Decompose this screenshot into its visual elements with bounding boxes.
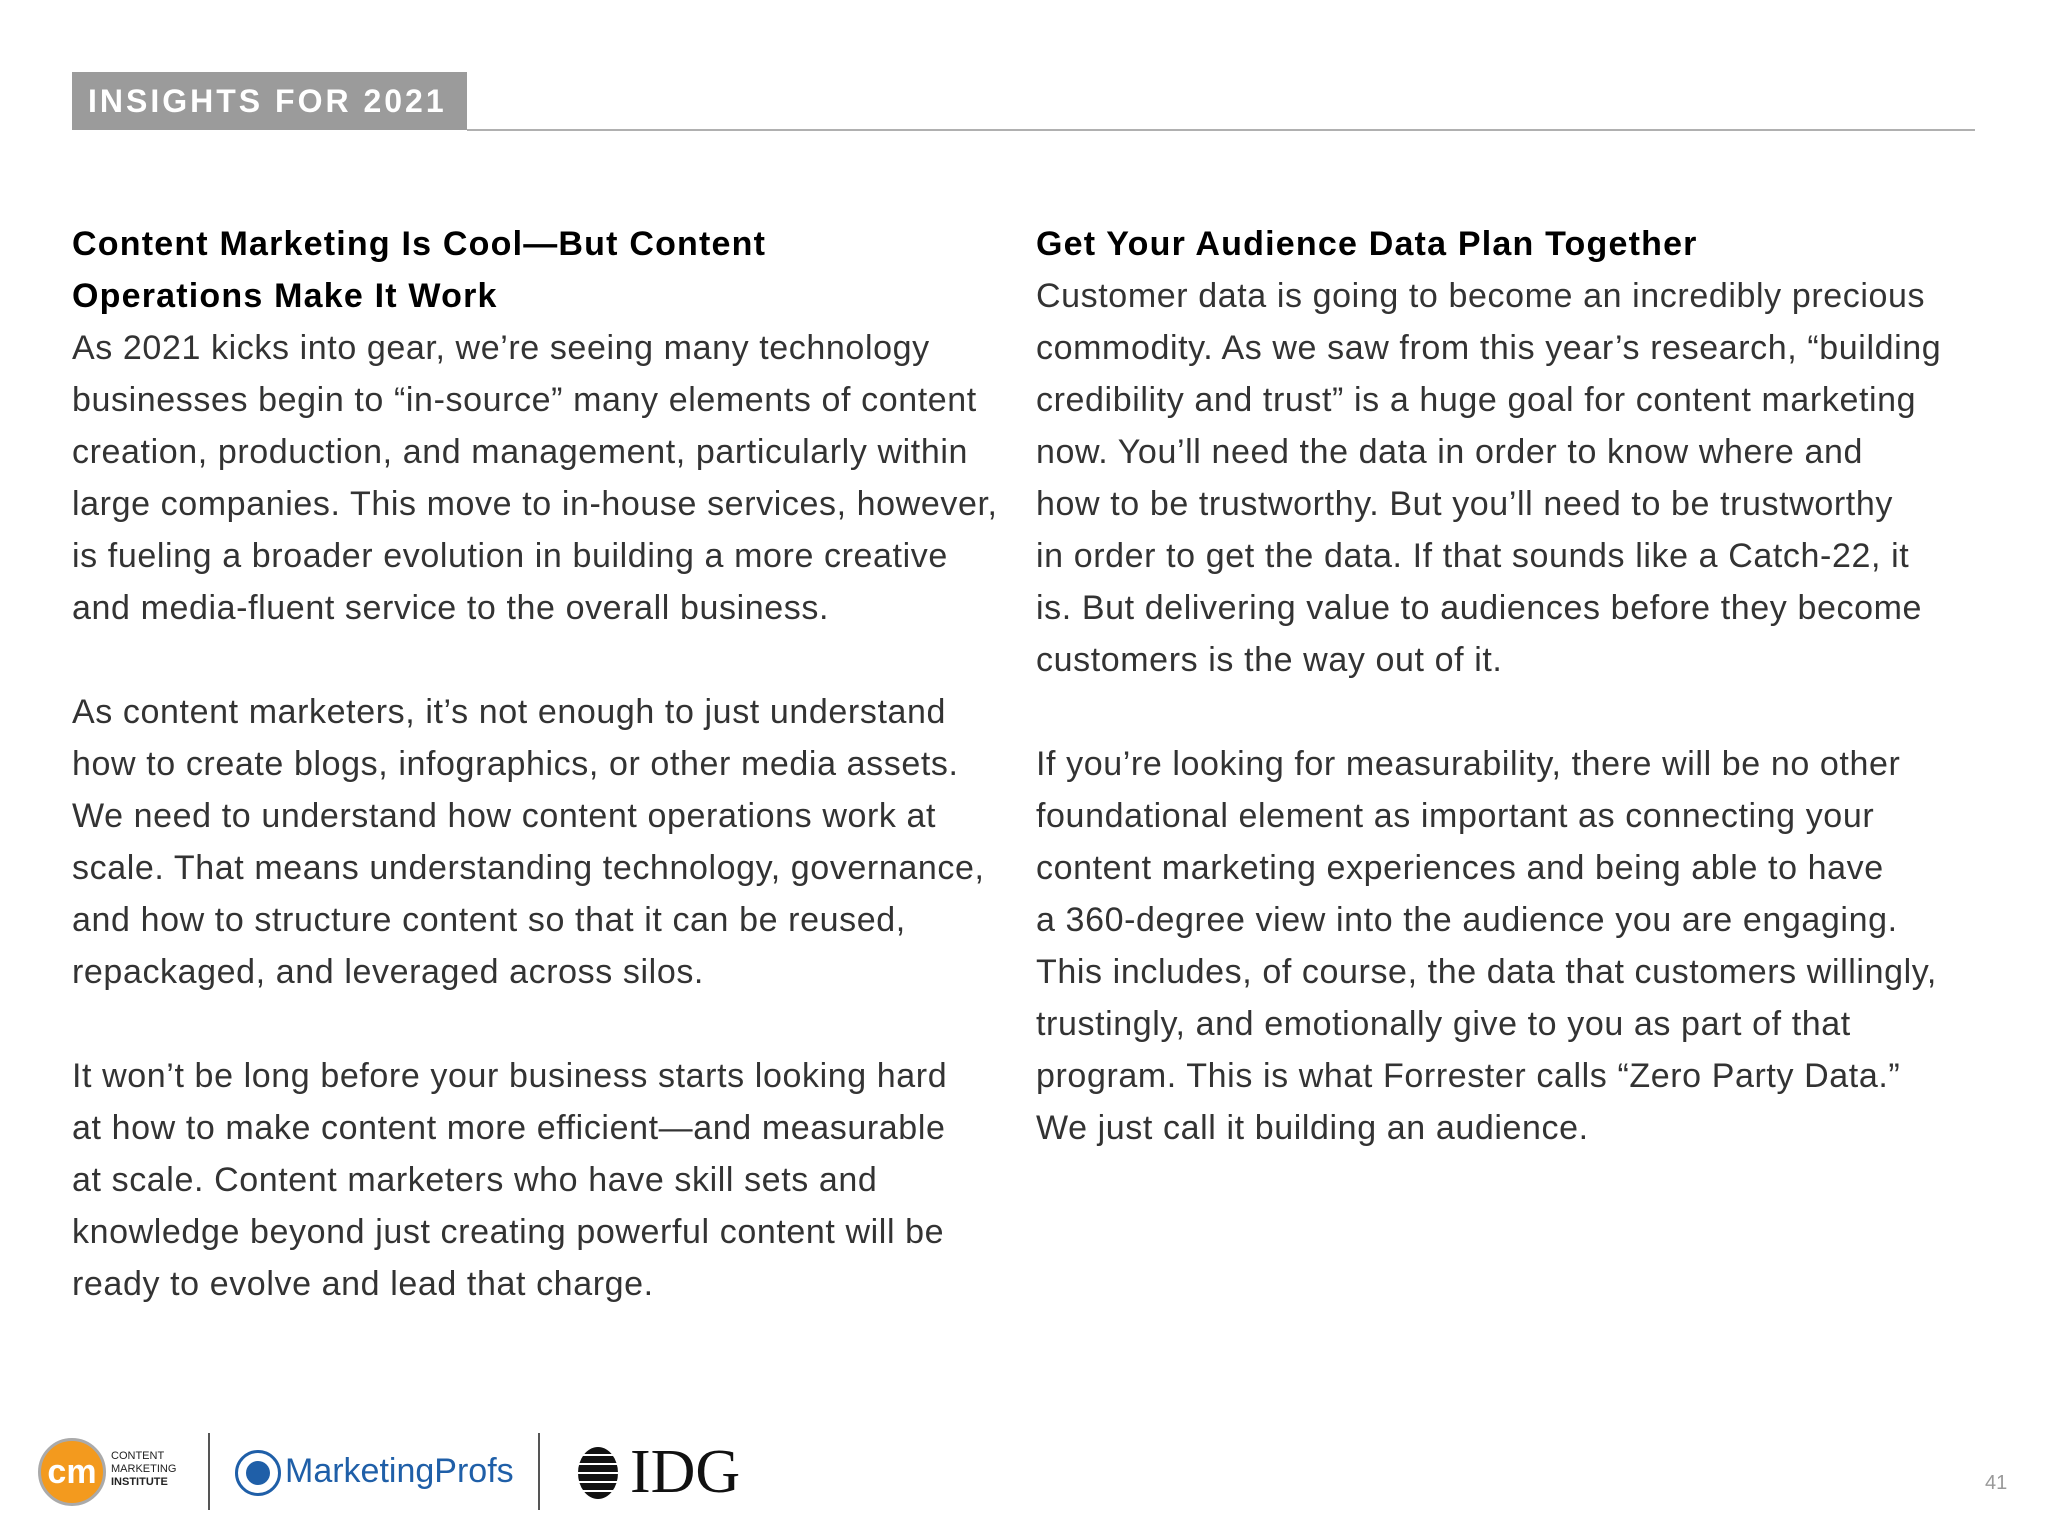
logo: IDG: IDG [630,1438,740,1506]
right column text: now. You’ll need the data in order to know where and [1036,433,1863,471]
logo: CMI: cm [47,1453,97,1491]
left column text: how to create blogs, infographics, or other media assets. [72,745,959,783]
logo: MarketingProfs [235,1450,514,1496]
left column text: Operations Make It Work [72,277,498,315]
left column text: at scale. Content marketers who have skill sets and [72,1161,877,1199]
left column text: As content marketers, it’s not enough to just understand [72,693,946,731]
left column text: large companies. This move to in-house services, however, [72,485,998,523]
left column text: scale. That means understanding technology, governance, [72,849,985,887]
right column text: We just call it building an audience. [1036,1109,1589,1147]
right column text: commodity. As we saw from this year’s research, “building [1036,329,1941,367]
right column text: in order to get the data. If that sounds like a Catch-22, it [1036,537,1909,575]
right column text [1036,225,1941,1147]
logo: CMI: INSTITUTE [111,1476,168,1488]
right column text: This includes, of course, the data that customers willingly, [1036,953,1937,991]
right column text: how to be trustworthy. But you’ll need to be trustworthy [1036,485,1893,523]
left column text: We need to understand how content operations work at [72,797,936,835]
header tab [72,72,467,130]
logo: CMI: CONTENT [111,1450,164,1462]
left column text: creation, production, and management, particularly within [72,433,968,471]
right column text: is. But delivering value to audiences before they become [1036,589,1922,627]
logo: CMI [38,1438,176,1506]
right column text: Customer data is going to become an incredibly precious [1036,277,1925,315]
right column text: If you’re looking for measurability, there will be no other [1036,745,1900,783]
left column text: at how to make content more efficient—and measurable [72,1109,945,1147]
right column text: program. This is what Forrester calls “Zero Party Data.” [1036,1057,1900,1095]
left column text: businesses begin to “in-source” many elements of content [72,381,977,419]
right column text: content marketing experiences and being able to have [1036,849,1884,887]
left column text: ready to evolve and lead that charge. [72,1265,654,1303]
logo: CMI: MARKETING [111,1463,176,1475]
right column text: credibility and trust” is a huge goal for content marketing [1036,381,1916,419]
left column text: Content Marketing Is Cool—But Content [72,225,766,263]
left column text: and media-fluent service to the overall business. [72,589,829,627]
header tab: INSIGHTS FOR 2021 [88,83,447,119]
right column text: Get Your Audience Data Plan Together [1036,225,1698,263]
left column text: and how to structure content so that it can be reused, [72,901,906,939]
page number: 41 [1985,1472,2007,1494]
left column text: repackaged, and leveraged across silos. [72,953,704,991]
footer logos [38,1433,740,1510]
left column text: knowledge beyond just creating powerful content will be [72,1213,944,1251]
left column text: As 2021 kicks into gear, we’re seeing many technology [72,329,930,367]
logo: MarketingProfs: MarketingProfs [285,1452,514,1490]
left column text: is fueling a broader evolution in building a more creative [72,537,948,575]
right column text: trustingly, and emotionally give to you as part of that [1036,1005,1851,1043]
right column text: a 360-degree view into the audience you are engaging. [1036,901,1898,939]
left column text [72,225,998,1303]
logo: IDG [578,1438,740,1506]
left column text: It won’t be long before your business starts looking hard [72,1057,947,1095]
right column text: foundational element as important as connecting your [1036,797,1874,835]
right column text: customers is the way out of it. [1036,641,1502,679]
